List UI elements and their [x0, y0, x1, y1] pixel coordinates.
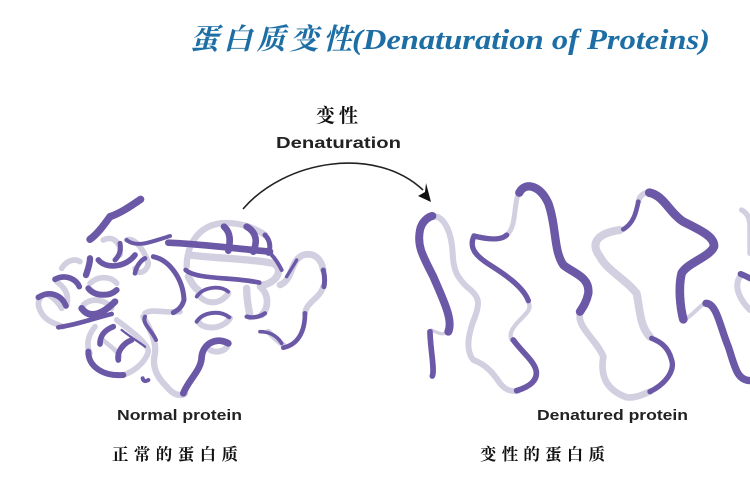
- title: (Denaturation of Proteins): [352, 24, 710, 56]
- arrow: denaturation: [243, 163, 431, 209]
- label: normal protein english: Normal protein: [117, 407, 242, 424]
- title: 蛋白质变性: [190, 24, 356, 56]
- icon: denatured protein ribbon: [419, 186, 750, 397]
- label: denatured protein english: Denatured protein: [537, 407, 688, 424]
- label: denaturation chinese: 变性: [316, 104, 358, 127]
- label: denatured protein chinese: 变性的蛋白质: [480, 444, 606, 464]
- title: [190, 24, 710, 56]
- label: denaturation english: Denaturation: [276, 135, 401, 152]
- label: normal protein chinese: 正常的蛋白质: [112, 444, 238, 464]
- icon: normal protein ribbon: [38, 199, 325, 395]
